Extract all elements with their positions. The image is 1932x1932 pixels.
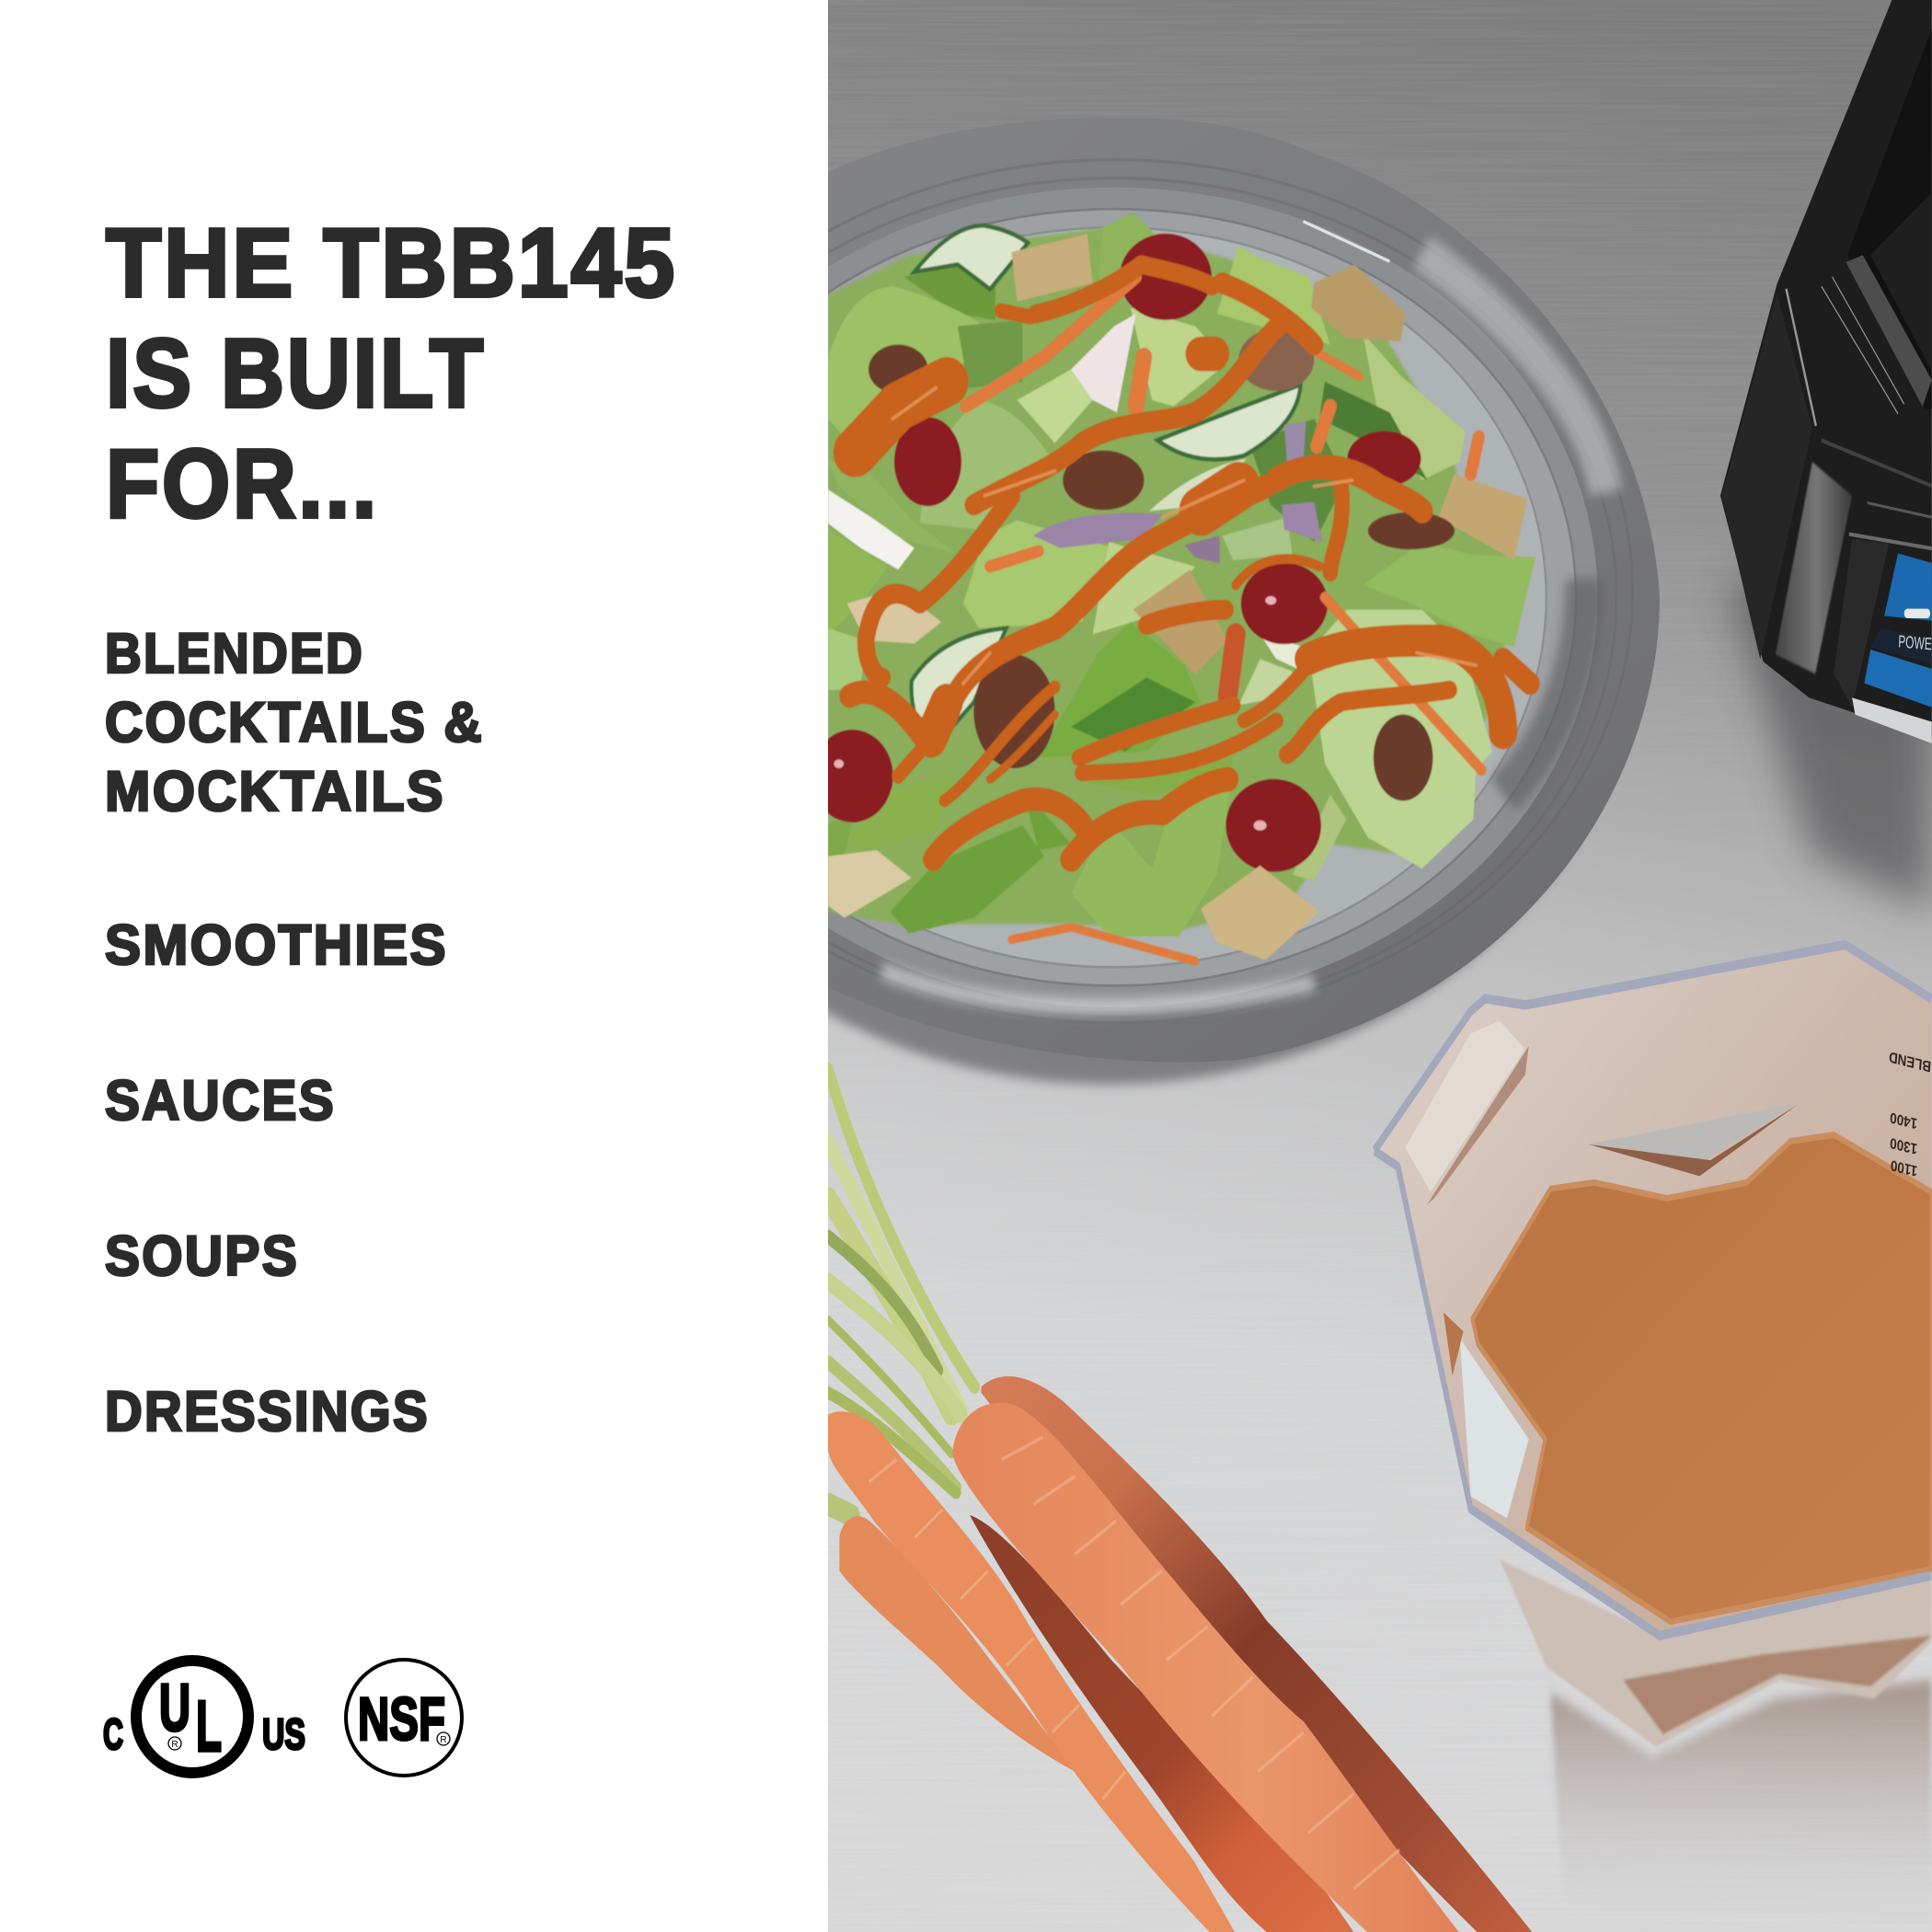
list item: blended cocktails and mocktails: MOCKTAILS <box>105 760 445 822</box>
plate highlights <box>882 252 1605 1006</box>
illustration: blender jar with puree <box>1374 945 1932 1932</box>
blue control panel <box>1884 553 1932 621</box>
illustration: carrots <box>828 1069 1532 1932</box>
carrot shreds <box>966 277 1481 961</box>
icon: cULus certification mark <box>103 1661 305 1773</box>
list item: blended cocktails and mocktails: COCKTAILS & <box>105 691 484 753</box>
measurement markings: 1300 <box>1890 1133 1918 1157</box>
list item: smoothies: SMOOTHIES <box>105 914 448 976</box>
jar reflection on counter <box>1550 1680 1931 1932</box>
lower corner highlight <box>1776 462 1852 673</box>
panel: food photo on stainless steel <box>828 0 1932 1932</box>
title: THE TBB145 <box>106 209 677 317</box>
title: FOR... <box>106 430 379 538</box>
title <box>106 209 677 538</box>
list item: soups: SOUPS <box>105 1225 299 1287</box>
measurement markings: 1100 <box>1890 1156 1918 1179</box>
illustration: blender base <box>1720 0 1932 743</box>
salad base <box>828 227 1524 930</box>
puree surface <box>1472 1135 1931 1622</box>
edge highlights <box>1787 277 1932 517</box>
jar lower body <box>1500 1559 1931 1746</box>
handle highlights <box>1405 1021 1525 1192</box>
list item: dressings: DRESSINGS <box>105 1380 430 1443</box>
dressing drizzle <box>849 265 1530 859</box>
list item: sauces: SAUCES <box>105 1069 336 1132</box>
icon: cULus certification mark: R <box>171 1740 178 1750</box>
carrot tops <box>828 1069 974 1515</box>
left facet <box>1722 293 1812 660</box>
jar interior <box>1374 945 1931 1636</box>
carrot ridges <box>869 1437 1399 1889</box>
onions <box>828 314 1322 672</box>
list item: blended cocktails and mocktails <box>105 622 484 822</box>
blender shadow on counter <box>1730 515 1932 911</box>
icon: NSF certification mark: R <box>440 1735 447 1745</box>
inner wall reflection <box>1587 1103 1798 1164</box>
cucumber slices <box>912 225 1301 752</box>
plate inner ring <box>631 188 1597 1007</box>
grey strip <box>1846 255 1932 407</box>
plate rim <box>563 118 1660 1063</box>
tomatoes <box>811 234 1421 871</box>
title: IS BUILT <box>106 319 486 428</box>
blender body <box>1720 0 1932 736</box>
list item: blended cocktails and mocktails: BLENDED <box>105 622 364 684</box>
icon: cULus certification mark: L <box>196 1685 222 1766</box>
top panel <box>1847 29 1932 409</box>
rim <box>1374 945 1931 1636</box>
measurement markings: 1400 <box>1890 1109 1918 1132</box>
measurement markings <box>1888 1048 1932 1179</box>
icon: cULus certification mark: U <box>159 1672 190 1745</box>
croutons <box>828 234 1527 960</box>
icon: NSF certification mark: NSF <box>358 1685 445 1753</box>
lettuce <box>828 213 1535 937</box>
plate shadow <box>574 135 1643 1085</box>
pecans <box>868 329 1455 800</box>
icon: cULus certification mark: US <box>262 1709 305 1758</box>
silver trim <box>1852 697 1932 743</box>
icon: cULus certification mark: C <box>103 1709 123 1758</box>
icon: NSF certification mark <box>346 1660 462 1776</box>
measurement markings: BLEND <box>1888 1048 1932 1075</box>
illustration: salad plate <box>563 118 1660 1085</box>
glass facet <box>1460 1338 1529 1518</box>
control slot <box>1834 539 1889 707</box>
panel: white text column <box>0 0 828 1932</box>
